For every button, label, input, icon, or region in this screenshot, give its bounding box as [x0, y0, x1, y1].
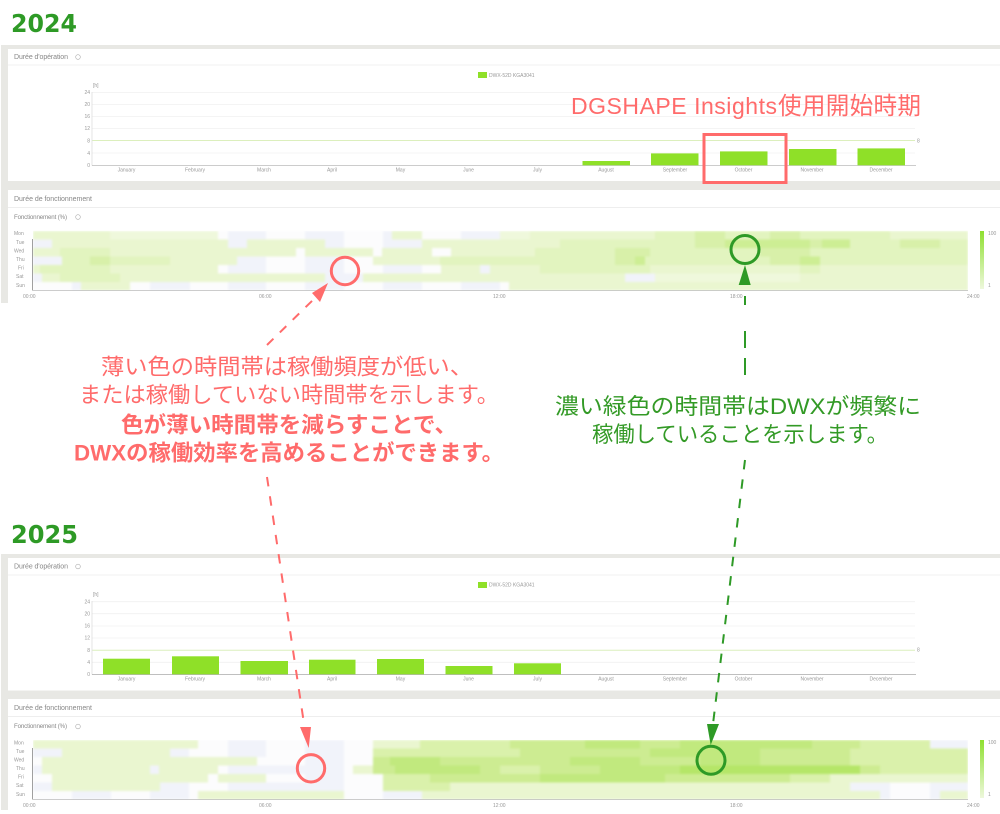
heatmap axes: 2025: 18:00 — [730, 803, 743, 809]
bar chart: 2025 operating duration: November — [800, 676, 824, 682]
marker: green circle 2024 — [731, 236, 759, 264]
pink annotation text: または稼働していない時間帯を示します。 — [79, 382, 499, 408]
bar chart: 2025 operating duration: June — [463, 676, 474, 682]
bar chart: 2024 operating duration: May — [396, 168, 406, 174]
panel heading: Durée de fonctionnement 2025 — [14, 705, 92, 730]
marker: pink circle 2025 — [297, 755, 325, 782]
legend: 2025 bar chart: DWX-52D KGA3041 — [489, 582, 535, 588]
bar chart: 2024 operating duration: [h] — [93, 83, 99, 89]
heatmap scale: 2025 — [980, 740, 997, 798]
bar chart: 2024 operating duration: March — [257, 168, 271, 174]
bar chart: 2025 operating duration: 8 — [87, 648, 90, 654]
marker: green circle 2025 — [697, 746, 725, 774]
heatmap axes: 2024: 06:00 — [259, 294, 272, 300]
bar chart: 2024 operating duration: September — [663, 168, 688, 174]
bar chart: 2024 operating duration: 0 — [87, 163, 90, 169]
bar chart: 2024 operating duration — [84, 83, 920, 174]
callout: DGSHAPE Insights start period: 使用開始時期 — [778, 93, 921, 120]
bar chart: 2025 operating duration: 16 — [84, 624, 90, 630]
heatmap axes: 2025: Thu — [16, 766, 25, 772]
heatmap axes: 2025: Mon — [14, 740, 24, 746]
panel heading: Durée de fonctionnement 2024 — [14, 196, 92, 221]
legend: 2024 bar chart: DWX-52D KGA3041 — [489, 73, 535, 79]
heatmap: 2024 utilisation by weekday and hour — [33, 231, 968, 290]
pink annotation text: DWXの稼働効率を高めることができます。 — [74, 440, 504, 466]
panel heading: Durée de fonctionnement 2025: Fonctionnement (%) — [14, 723, 67, 730]
bar chart: 2024 operating duration: July — [533, 168, 542, 174]
bar chart: 2025 operating duration: December — [869, 676, 893, 682]
bar chart: 2024 operating duration: 8 — [87, 138, 90, 144]
bar chart: 2024 operating duration: April — [327, 168, 337, 174]
heatmap axes: 2024: 12:00 — [493, 294, 506, 300]
bar chart: 2025 operating duration: March — [257, 676, 271, 682]
bar chart: 2024 operating duration: 4 — [87, 151, 90, 157]
heatmap axes: 2024: 24:00 — [967, 294, 980, 300]
bar chart: 2025 operating duration: February — [185, 676, 205, 682]
panel heading: Durée de fonctionnement 2024: Fonctionnement (%) — [14, 214, 67, 221]
heatmap axes: 2025: Sat — [16, 783, 24, 789]
heatmap axes: 2024 — [14, 231, 980, 300]
heatmap axes: 2025: 06:00 — [259, 803, 272, 809]
bar chart: 2025 operating duration: August — [598, 676, 614, 682]
arrow: pink dashed to 2024 circle — [267, 283, 328, 345]
bar chart: 2024 operating duration: 24 — [84, 90, 90, 96]
bar chart: 2024 operating duration: 20 — [84, 102, 90, 108]
heatmap axes: 2024: Tue — [16, 240, 25, 246]
panel heading: Durée d'opération 2025: Durée d'opération — [14, 564, 68, 570]
arrow: green dashed to 2024 circle — [739, 265, 751, 382]
bar chart: 2025 operating duration: 4 — [87, 660, 90, 666]
heatmap axes: 2025: Tue — [16, 749, 25, 755]
bar chart: 2024 operating duration: 16 — [84, 114, 90, 120]
bar chart: 2025 operating duration: July — [533, 676, 542, 682]
arrow: green dashed to 2025 circle — [707, 460, 745, 745]
bar chart: 2025 operating duration: May — [396, 676, 406, 682]
green annotation text: 稼働していることを示します。 — [592, 422, 888, 447]
bar chart: 2024 operating duration: June — [463, 168, 474, 174]
heatmap axes: 2024: Wed — [14, 248, 24, 254]
bar chart: 2025 operating duration: April — [327, 676, 337, 682]
arrow: pink dashed to 2025 circle — [267, 477, 311, 748]
heatmap axes: 2025: Sun — [16, 792, 25, 798]
heatmap axes: 2024: Thu — [16, 257, 25, 263]
panel heading: Durée de fonctionnement 2024: Durée de fonctionnement — [14, 196, 92, 203]
heatmap scale: 2024: 100 — [988, 231, 997, 237]
heading: 2025: 2025 — [11, 520, 78, 549]
heading: 2024: 2024 — [11, 9, 77, 38]
bar chart: 2024 operating duration: August — [598, 168, 614, 174]
panel heading: Durée de fonctionnement 2025: Durée de fonctionnement — [14, 705, 92, 712]
green annotation text — [555, 394, 921, 447]
bar chart: 2025 operating duration: 20 — [84, 612, 90, 618]
heatmap axes: 2025 — [14, 740, 980, 809]
heatmap axes: 2024: Fri — [18, 266, 24, 272]
heatmap scale: 2024 — [980, 231, 997, 289]
pink annotation text: 色が薄い時間帯を減らすことで、 — [121, 412, 457, 438]
heatmap scale: 2025: 1 — [988, 792, 991, 798]
bar chart: 2025 operating duration: January — [118, 676, 136, 682]
heatmap axes: 2025: Wed — [14, 758, 24, 764]
heatmap scale: 2025: 100 — [988, 740, 997, 746]
bar chart: 2025 operating duration: 8 — [917, 648, 920, 654]
bar chart: 2024 operating duration: October — [735, 168, 753, 174]
heatmap: 2025 utilisation by weekday and hour — [33, 740, 968, 800]
bar chart: 2025 operating duration: September — [663, 676, 688, 682]
bar chart: 2025 operating duration — [84, 592, 920, 682]
pink annotation text: 薄い色の時間帯は稼働頻度が低い、 — [101, 354, 473, 380]
heatmap axes: 2024: Sat — [16, 274, 24, 280]
heatmap axes: 2025: 24:00 — [967, 803, 980, 809]
callout: DGSHAPE Insights start period — [571, 93, 921, 120]
bar chart: 2025 operating duration: 12 — [84, 636, 90, 642]
heatmap axes: 2024: Mon — [14, 231, 24, 237]
marker: pink circle 2024 — [331, 257, 359, 285]
highlight box: October 2024 — [704, 134, 786, 182]
panel heading: Durée d'opération 2024: Durée d'opération — [14, 54, 68, 61]
bar chart: 2025 operating duration: [h] — [93, 592, 99, 598]
bar chart: 2024 operating duration: 8 — [917, 138, 920, 144]
pink annotation text — [74, 354, 504, 466]
bar chart: 2025 operating duration: 24 — [84, 600, 90, 606]
heatmap axes: 2024: 18:00 — [730, 294, 743, 300]
panel frame: 2024 background — [1, 45, 1000, 303]
bar chart: 2024 operating duration: December — [869, 168, 893, 174]
heatmap scale: 2024: 1 — [988, 283, 991, 289]
heatmap axes: 2024: 00:00 — [23, 294, 36, 300]
heatmap axes: 2025: Fri — [18, 774, 24, 780]
bar chart: 2024 operating duration: February — [185, 168, 205, 174]
callout: DGSHAPE Insights start period: DGSHAPE Insights — [571, 93, 777, 119]
heatmap axes: 2024: Sun — [16, 283, 25, 289]
bar chart: 2024 operating duration: January — [118, 168, 136, 174]
heatmap axes: 2025: 12:00 — [493, 803, 506, 809]
bar chart: 2024 operating duration: 12 — [84, 126, 90, 132]
panel frame: 2025 background — [1, 554, 1000, 814]
bar chart: 2025 operating duration: 0 — [87, 672, 90, 678]
legend: 2024 bar chart — [478, 72, 535, 79]
bar chart: 2024 operating duration: November — [800, 168, 824, 174]
heatmap axes: 2025: 00:00 — [23, 803, 36, 809]
green annotation text: 濃い緑色の時間帯はDWXが頻繁に — [555, 394, 921, 419]
bar chart: 2025 operating duration: October — [735, 676, 753, 682]
